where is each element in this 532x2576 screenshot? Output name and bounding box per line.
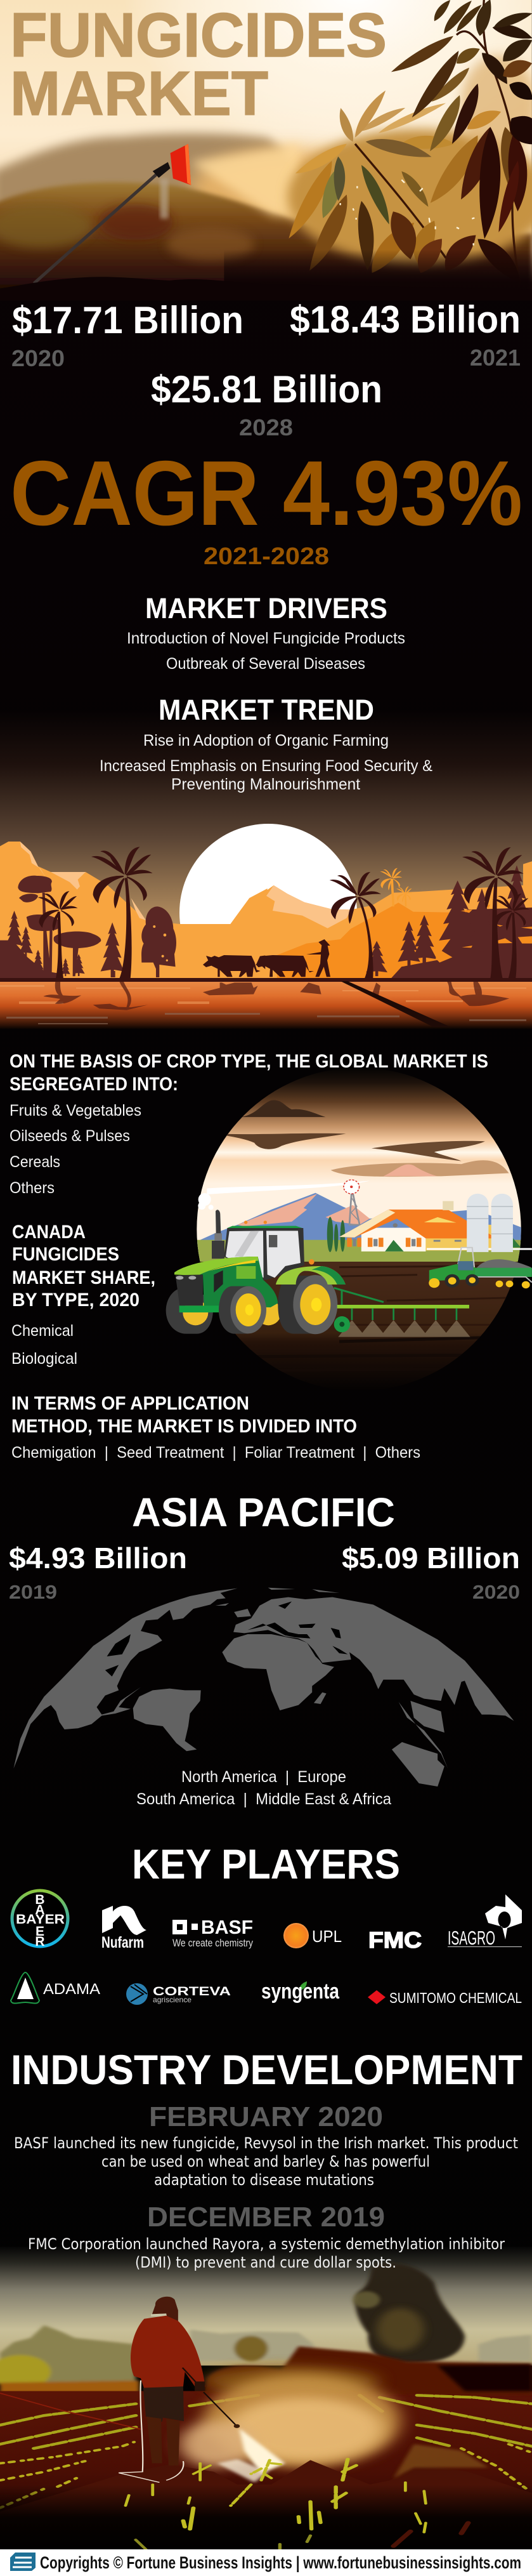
logo: BASF: We create chemistry bbox=[172, 1937, 253, 1949]
CAGR callout: 2021-2028 bbox=[204, 543, 329, 570]
Asia Pacific 2020 bbox=[342, 1542, 520, 1603]
farm sunset scene bbox=[0, 711, 532, 1039]
December 2019 development: (DMI) to prevent and cure dollar spots. bbox=[135, 2254, 396, 2271]
market size 2028: 2028 bbox=[239, 414, 293, 440]
market drivers: MARKET DRIVERS bbox=[145, 592, 387, 624]
left half of scene bbox=[0, 842, 268, 982]
Canada market share heading: BY TYPE, 2020 bbox=[12, 1290, 139, 1311]
small distant palms bbox=[380, 868, 412, 906]
market size 2028: $25.81 Billion bbox=[151, 368, 382, 411]
logo: Bayer: E bbox=[36, 1924, 44, 1939]
Asia Pacific 2020: 2020 bbox=[472, 1581, 520, 1603]
windmill bbox=[344, 1180, 360, 1225]
logo: Bayer bbox=[12, 1891, 68, 1949]
logo: Nufarm: Nufarm bbox=[101, 1934, 144, 1952]
footer logo bbox=[10, 2553, 36, 2571]
market size 2028 bbox=[151, 368, 382, 440]
February 2020 development: FEBRUARY 2020 bbox=[149, 2101, 383, 2132]
crop type list bbox=[10, 1102, 141, 1197]
market drivers: Introduction of Novel Fungicide Products bbox=[127, 630, 405, 647]
ox and farmer silhouettes bbox=[256, 939, 330, 977]
type list: Chemical bbox=[11, 1322, 74, 1340]
foreground soil mounds bbox=[16, 2460, 531, 2507]
market size 2020 bbox=[11, 299, 243, 371]
Canada market share heading: FUNGICIDES bbox=[12, 1244, 119, 1265]
market size 2020: $17.71 Billion bbox=[12, 299, 243, 341]
world map globe bbox=[13, 1588, 514, 1790]
title: MARKET bbox=[10, 58, 268, 128]
market trend: Preventing Malnourishment bbox=[171, 776, 360, 793]
big green tractor bbox=[166, 1193, 470, 1337]
logo: Bayer: BAYER bbox=[16, 1912, 65, 1927]
paddy water with reflections bbox=[0, 978, 532, 1039]
logo: Adama bbox=[11, 1972, 100, 2004]
market trend bbox=[100, 694, 432, 793]
sprayer lance bbox=[0, 144, 532, 301]
circular farm illustration bbox=[166, 1067, 532, 1391]
market drivers bbox=[127, 592, 405, 673]
crop type segment heading bbox=[10, 1051, 488, 1095]
small tractor with trailer bbox=[429, 1248, 532, 1288]
February 2020 development bbox=[14, 2101, 518, 2189]
background trees bbox=[0, 2325, 532, 2398]
dust cloud and spray bbox=[204, 2374, 400, 2467]
field bbox=[0, 2391, 532, 2512]
crop type segment heading: SEGREGATED INTO: bbox=[10, 1074, 178, 1095]
farmer with sprayer bbox=[0, 2297, 240, 2483]
seedling rows bbox=[0, 2395, 532, 2508]
market size 2021 bbox=[290, 298, 521, 371]
Asia Pacific 2019 bbox=[9, 1542, 187, 1603]
market trend: Rise in Adoption of Organic Farming bbox=[143, 732, 389, 750]
logo: Syngenta: syngenta bbox=[261, 1979, 340, 2004]
other regions: South America | Middle East & Africa bbox=[136, 1790, 391, 1808]
farmhouse bbox=[339, 1210, 532, 1252]
logo: Nufarm bbox=[101, 1906, 146, 1952]
crop type list: Oilseeds & Pulses bbox=[10, 1127, 130, 1145]
hero photo: sprayer nozzle and leaves bbox=[0, 0, 532, 301]
application method heading: IN TERMS OF APPLICATION bbox=[11, 1393, 249, 1414]
grain silos bbox=[443, 1194, 513, 1252]
logo: Isagro: ISAGRO bbox=[448, 1927, 495, 1949]
logo: Corteva: CORTEVA bbox=[153, 1985, 231, 1998]
logo: FMC: FMC bbox=[368, 1928, 422, 1953]
application method heading bbox=[11, 1393, 357, 1437]
Canada market share heading: MARKET SHARE, bbox=[12, 1267, 155, 1288]
application method list: Chemigation | Seed Treatment | Foliar Treatment | Others bbox=[11, 1444, 420, 1462]
type list: Biological bbox=[11, 1350, 77, 1368]
crop type segment heading: ON THE BASIS OF CROP TYPE, THE GLOBAL MARKET IS bbox=[10, 1051, 488, 1072]
market size 2020: 2020 bbox=[11, 345, 65, 371]
market size 2021: 2021 bbox=[470, 345, 521, 371]
crop type list: Cereals bbox=[10, 1153, 60, 1171]
type list bbox=[11, 1322, 77, 1368]
regional heading: ASIA PACIFIC bbox=[132, 1489, 395, 1535]
market trend: Increased Emphasis on Ensuring Food Security & bbox=[100, 757, 432, 775]
logo: UPL: UPL bbox=[312, 1927, 342, 1946]
cypress trees bbox=[327, 1217, 345, 1252]
logo: Bayer: B bbox=[35, 1892, 45, 1907]
February 2020 development: adaptation to disease mutations bbox=[154, 2171, 374, 2189]
Asia Pacific 2019: 2019 bbox=[9, 1581, 57, 1603]
other regions: North America | Europe bbox=[181, 1768, 346, 1786]
logo: Bayer: A bbox=[35, 1903, 45, 1917]
logo: Corteva: agriscience bbox=[153, 1995, 191, 2004]
December 2019 development bbox=[28, 2202, 505, 2271]
February 2020 development: can be used on wheat and barley & has powerful bbox=[101, 2153, 430, 2170]
logo: Corteva bbox=[126, 1983, 231, 2005]
market trend: MARKET TREND bbox=[159, 694, 374, 726]
crop type list: Fruits & Vegetables bbox=[10, 1102, 141, 1120]
leaves bbox=[224, 0, 532, 300]
market size 2021: $18.43 Billion bbox=[290, 298, 521, 341]
logo: UPL bbox=[283, 1923, 342, 1948]
logo: BASF: BASF bbox=[201, 1916, 253, 1938]
other regions bbox=[136, 1768, 391, 1808]
farmer spraying photo bbox=[0, 2247, 532, 2551]
right half of scene bbox=[256, 847, 532, 982]
crop type list: Others bbox=[10, 1179, 55, 1197]
title bbox=[10, 0, 387, 128]
foreground seedlings bbox=[126, 2459, 468, 2551]
Canada market share heading: CANADA bbox=[12, 1222, 86, 1243]
Asia Pacific 2019: $4.93 Billion bbox=[9, 1542, 187, 1575]
logo: Isagro bbox=[448, 1894, 522, 1949]
logo: Bayer: R bbox=[35, 1934, 45, 1949]
key players heading: KEY PLAYERS bbox=[132, 1840, 400, 1887]
logo: Adama: ADAMA bbox=[43, 1981, 100, 1998]
December 2019 development: DECEMBER 2019 bbox=[147, 2202, 385, 2233]
Canada market share heading bbox=[12, 1222, 155, 1311]
footer bbox=[0, 2549, 532, 2576]
Asia Pacific 2020: $5.09 Billion bbox=[342, 1542, 520, 1575]
market drivers: Outbreak of Several Diseases bbox=[166, 655, 365, 673]
logo: BASF bbox=[172, 1916, 253, 1949]
application method heading: METHOD, THE MARKET IS DIVIDED INTO bbox=[11, 1416, 357, 1437]
title: FUNGICIDES bbox=[10, 0, 387, 70]
